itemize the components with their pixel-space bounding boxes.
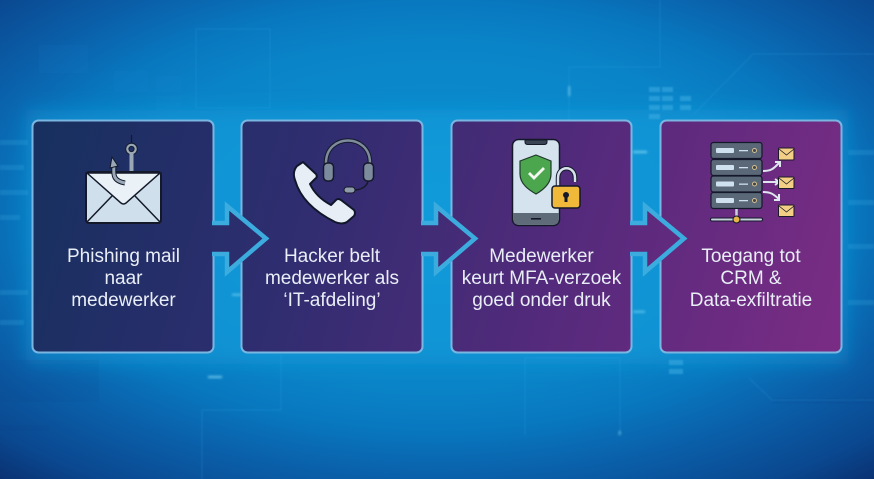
text: step 1: Phishing mail [67, 246, 180, 267]
text: step 2: medewerker als [265, 268, 399, 289]
arrow: step 3 to 4 [630, 206, 684, 272]
text: step 3: Medewerker [489, 246, 594, 267]
panel: CRM access [660, 120, 842, 352]
text: step 3: keurt MFA-verzoek [462, 268, 622, 289]
text: step 4: CRM & [720, 268, 782, 289]
icon: envelope with fishing hook [86, 135, 161, 223]
icon: telephone handset and headset [294, 140, 374, 224]
panel: phone call [242, 120, 422, 352]
arrow: step 2 to 3 [421, 206, 475, 272]
icon: server rack with exfiltrated mail [711, 142, 794, 223]
text: step 1: medewerker [71, 290, 176, 311]
panel: phishing mail [32, 120, 214, 352]
text: step 3: goed onder druk [472, 290, 611, 311]
arrow: step 1 to 2 [212, 206, 266, 272]
text: step 4: Data-exfiltratie [690, 290, 812, 311]
text: step 2: ‘IT-afdeling’ [283, 290, 381, 311]
text: step 1: naar [104, 268, 143, 289]
panel: MFA approval [452, 120, 632, 352]
text: step 2: Hacker belt [284, 246, 381, 267]
icon: phone with shield and padlock [512, 140, 580, 226]
text: step 4: Toegang tot [701, 246, 801, 267]
